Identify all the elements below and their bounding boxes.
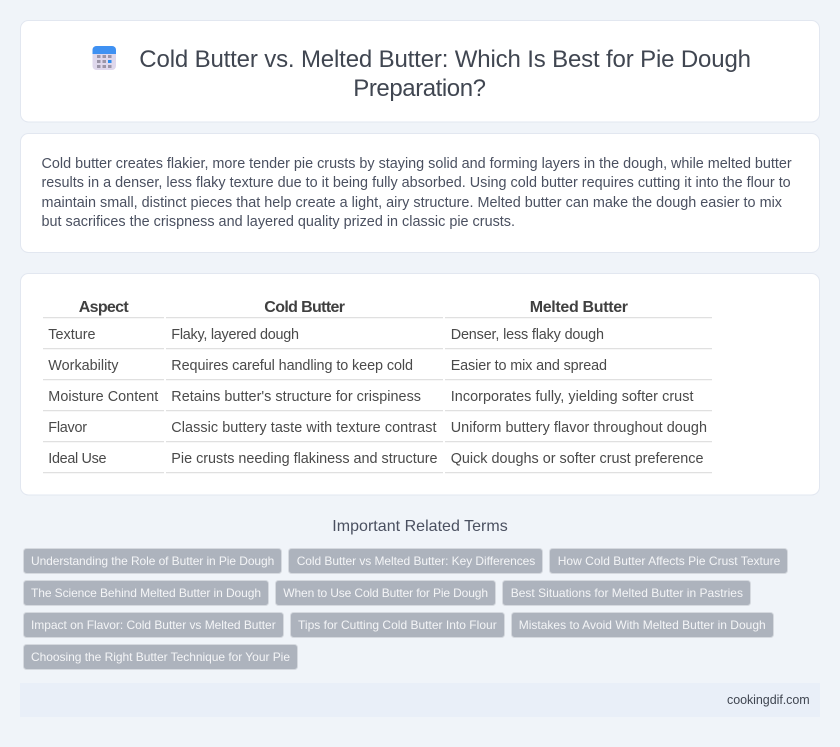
tag xyxy=(502,580,750,606)
table row: ideal use xyxy=(48,451,704,467)
tag: Impact on Flavor: Cold Butter vs Melted Butter xyxy=(31,618,276,632)
panel: header xyxy=(20,20,820,122)
table row: ideal use: Pie crusts needing flakiness and structure xyxy=(171,451,438,467)
table row: texture: Flaky, layered dough xyxy=(171,327,299,343)
table row: moisture content: Moisture Content xyxy=(48,389,158,405)
text block: introduction: results in a denser, less flaky texture due to it being fully absorbed. Using cold butter requires cutting it into the flour to xyxy=(42,175,791,191)
tag xyxy=(24,644,298,670)
tag xyxy=(512,612,774,638)
table row: moisture content: Retains butter's structure for crispiness xyxy=(171,389,421,405)
title: Cold Butter vs. Melted Butter: Which Is Best for Pie Dough xyxy=(139,46,751,73)
table row: flavor: Classic buttery taste with texture contrast xyxy=(171,420,437,436)
tag: How Cold Butter Affects Pie Crust Texture xyxy=(558,554,781,568)
table row: texture: Denser, less flaky dough xyxy=(451,327,604,343)
tag: Understanding the Role of Butter in Pie Dough xyxy=(31,554,274,568)
table row: flavor: Uniform buttery flavor throughout dough xyxy=(451,420,707,436)
icon: calendar xyxy=(92,46,116,70)
table row: workability: Easier to mix and spread xyxy=(451,358,607,374)
title xyxy=(139,46,751,102)
table row: texture: Texture xyxy=(48,327,96,343)
table row: texture xyxy=(48,327,604,343)
tag: When to Use Cold Butter for Pie Dough xyxy=(283,586,488,600)
table row: workability xyxy=(48,358,607,374)
title: Preparation? xyxy=(353,75,486,102)
text block: introduction xyxy=(42,156,792,230)
table row: flavor: Flavor xyxy=(48,420,87,436)
heading: important related terms: Important Related Terms xyxy=(332,518,508,535)
tag xyxy=(288,548,542,574)
tag xyxy=(24,580,268,606)
table row: flavor xyxy=(48,420,707,436)
text block: introduction: but sacrifices the crispness and layered quality prized in classic pie crusts. xyxy=(42,214,515,230)
tag xyxy=(276,580,496,606)
table row: moisture content: Incorporates fully, yielding softer crust xyxy=(451,389,694,405)
panel: comparison table xyxy=(20,274,820,495)
tag: The Science Behind Melted Butter in Dough xyxy=(31,586,261,600)
footer xyxy=(20,683,820,717)
footer: cookingdif.com xyxy=(727,693,810,707)
table row: workability: Requires careful handling to keep cold xyxy=(171,358,413,374)
tag: Choosing the Right Butter Technique for Your Pie xyxy=(31,650,290,664)
table row: ideal use: Quick doughs or softer crust preference xyxy=(451,451,704,467)
table row: moisture content xyxy=(48,389,694,405)
tag xyxy=(550,548,788,574)
related terms tags xyxy=(24,548,788,670)
tag xyxy=(24,548,282,574)
panel: introduction xyxy=(20,134,820,252)
tag: Best Situations for Melted Butter in Pastries xyxy=(511,586,743,600)
table header: Cold Butter xyxy=(264,299,345,316)
tag xyxy=(290,612,504,638)
tag: Tips for Cutting Cold Butter Into Flour xyxy=(298,618,497,632)
text block: introduction: Cold butter creates flakier, more tender pie crusts by staying solid and forming layers in the dough, while melted butter xyxy=(42,156,792,172)
table row: workability: Workability xyxy=(48,358,119,374)
tag: Cold Butter vs Melted Butter: Key Differences xyxy=(297,554,535,568)
table header xyxy=(79,299,628,316)
table header: Aspect xyxy=(79,299,129,316)
table row: ideal use: Ideal Use xyxy=(48,451,106,467)
tag: Mistakes to Avoid With Melted Butter in Dough xyxy=(519,618,766,632)
table header: Melted Butter xyxy=(530,299,628,316)
text block: introduction: maintain small, distinct pieces that help create a light, airy structure. Melted butter can make the dough easier to mix xyxy=(42,195,783,211)
tag xyxy=(24,612,284,638)
